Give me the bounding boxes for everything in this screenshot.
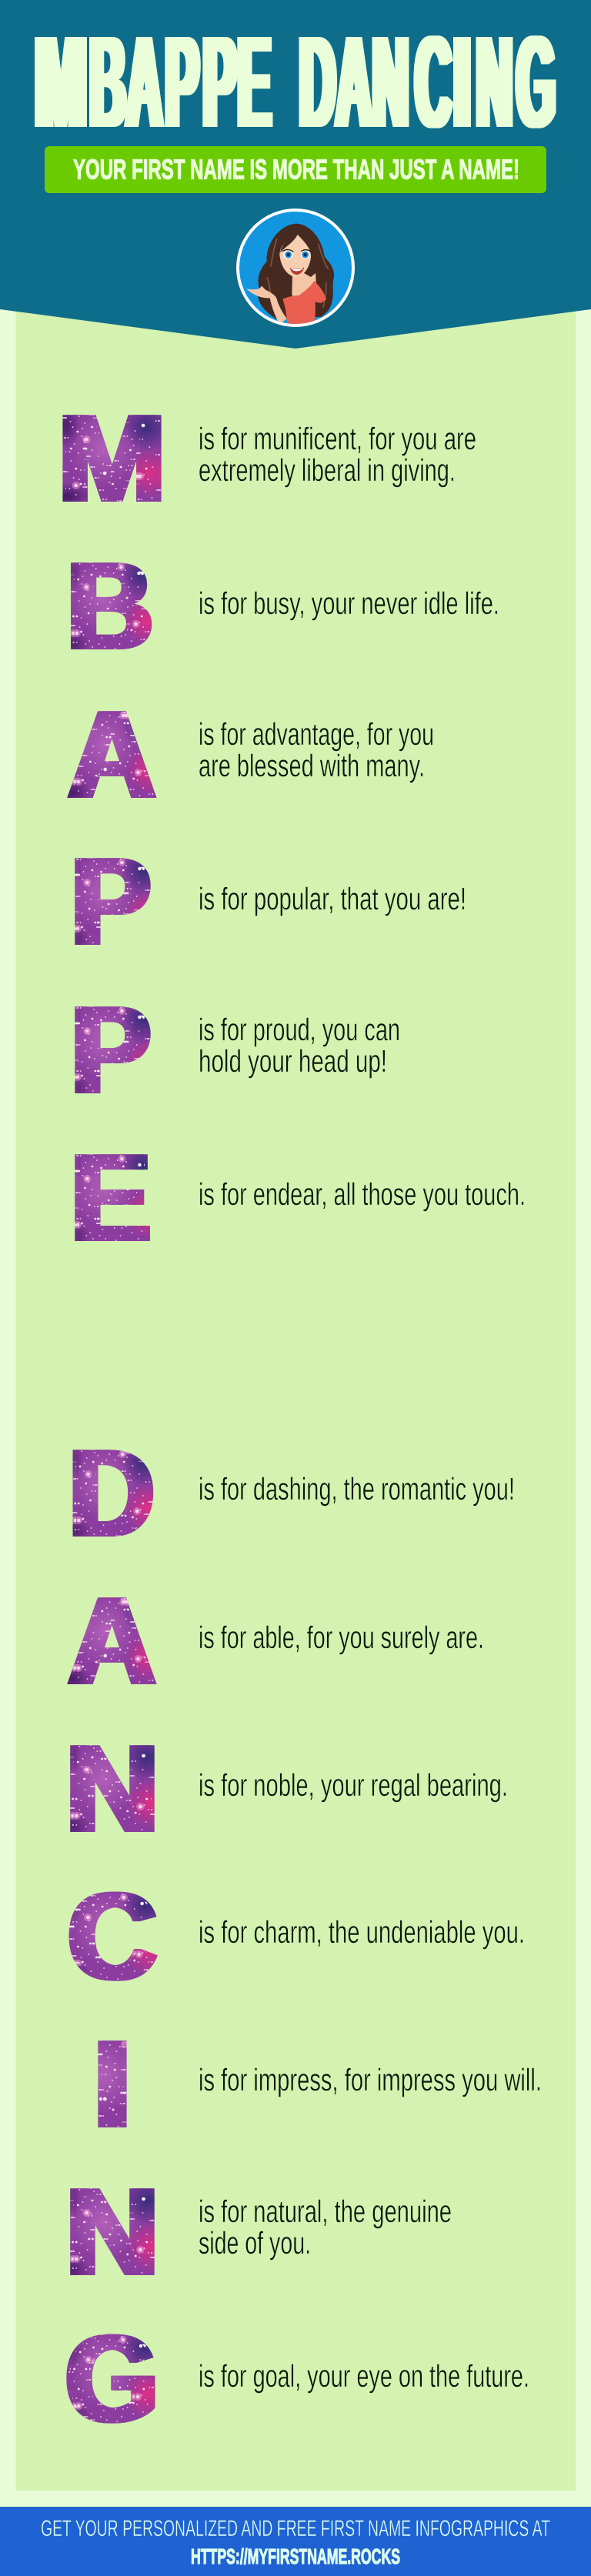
title: MBAPPE <box>40 10 271 155</box>
text: M: extremely liberal in giving. <box>199 452 456 488</box>
letter N: N <box>66 2162 159 2301</box>
letter E: E <box>71 1129 151 1267</box>
text: P second: hold your head up! <box>199 1043 387 1079</box>
row: E <box>71 1129 526 1267</box>
letter M: M <box>58 389 165 527</box>
text: N second: side of you. <box>199 2225 311 2261</box>
letter A: A <box>68 1571 155 1710</box>
footer <box>0 2507 591 2576</box>
letter P: P <box>71 981 151 1119</box>
text: M: is for munificent, for you are <box>199 421 476 456</box>
row: G <box>65 2310 529 2448</box>
row: N second <box>66 2162 452 2301</box>
letter C: C <box>68 1867 157 2005</box>
letter N: N <box>66 1719 159 1857</box>
header banner <box>0 0 591 349</box>
row: D <box>69 1424 515 1563</box>
row: M <box>58 389 476 527</box>
row: B <box>67 537 499 676</box>
row: C <box>68 1867 525 2005</box>
row: N <box>66 1719 508 1857</box>
letter G: G <box>65 2310 159 2448</box>
title <box>35 10 556 155</box>
text: A: are blessed with many. <box>199 748 425 783</box>
row: I <box>94 2014 542 2154</box>
letter P: P <box>71 833 151 971</box>
text: N second: is for natural, the genuine <box>199 2194 452 2229</box>
footer url: HTTPS://MYFIRSTNAME.ROCKS <box>191 2544 400 2568</box>
icon: avatar of woman <box>236 209 355 327</box>
letter B: B <box>67 537 153 676</box>
row: P <box>71 833 466 971</box>
subtitle banner <box>45 146 546 193</box>
letter D: D <box>69 1424 154 1563</box>
row: A <box>68 685 434 824</box>
letter I: I <box>94 2014 131 2154</box>
row: A second <box>68 1571 484 1710</box>
text: P: is for popular, that you are! <box>199 881 466 916</box>
text: A: is for advantage, for you <box>199 716 434 752</box>
title: DANCING <box>299 10 556 155</box>
row: P second <box>71 981 400 1119</box>
letter A: A <box>68 685 155 824</box>
text: P second: is for proud, you can <box>199 1012 400 1047</box>
